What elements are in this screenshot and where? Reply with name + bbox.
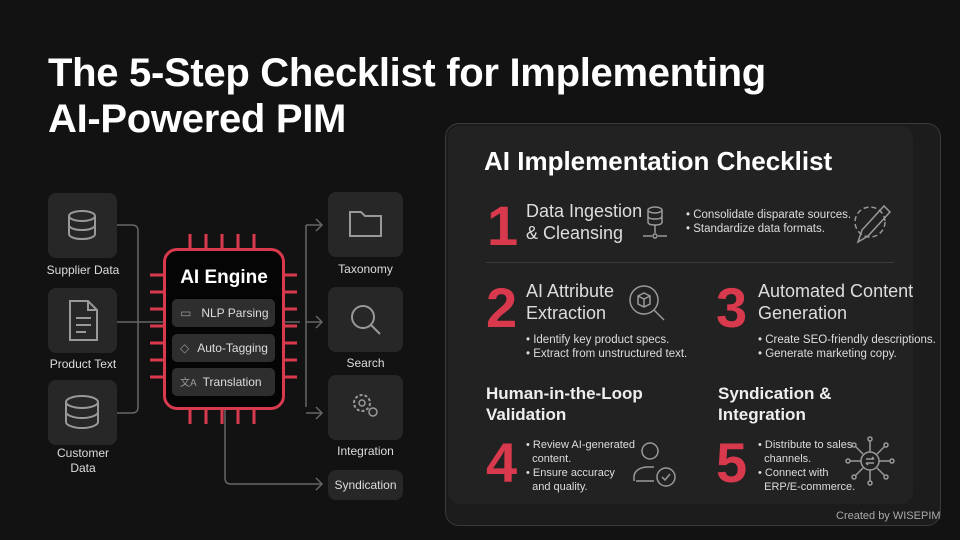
chip pins bbox=[150, 234, 297, 424]
output: taxonomy bbox=[328, 192, 403, 257]
step 3: 3 bbox=[716, 276, 747, 339]
text: Data bbox=[70, 461, 96, 475]
pill: translation bbox=[172, 368, 275, 396]
step 4: and quality. bbox=[532, 481, 588, 493]
input: customer data bbox=[48, 380, 117, 445]
panel: checklist bbox=[445, 123, 941, 526]
step 4: content. bbox=[532, 453, 571, 465]
step 2: AI Attribute bbox=[526, 281, 614, 301]
step 4: • Review AI-generated bbox=[526, 439, 635, 451]
step 3: Automated Content bbox=[758, 281, 913, 301]
text: Supplier Data bbox=[47, 263, 119, 277]
diagram: connectors bbox=[117, 218, 323, 490]
input: supplier data bbox=[48, 193, 117, 258]
step 1: 1 bbox=[487, 194, 518, 257]
pill: auto-tagging bbox=[172, 334, 275, 362]
text: Integration bbox=[337, 444, 394, 458]
step 5: ERP/E-commerce. bbox=[764, 481, 855, 493]
step 1: • Consolidate disparate sources. bbox=[686, 209, 851, 221]
step 3: • Create SEO-friendly descriptions. bbox=[758, 334, 936, 346]
step 5: 5 bbox=[716, 431, 747, 494]
step 3 bbox=[716, 276, 936, 360]
title: The 5-Step Checklist for Implementing bbox=[48, 51, 766, 95]
step 5: • Connect with bbox=[758, 467, 828, 479]
text: Taxonomy bbox=[338, 262, 393, 276]
text: Search bbox=[346, 356, 385, 370]
step 4 bbox=[486, 384, 676, 494]
step 5: channels. bbox=[764, 453, 811, 465]
text: Product Text bbox=[50, 357, 116, 371]
step 5 bbox=[716, 384, 895, 494]
step 2: • Extract from unstructured text. bbox=[526, 348, 687, 360]
step 2: Extraction bbox=[526, 303, 606, 323]
step 1 bbox=[487, 194, 891, 257]
checklist heading: AI Implementation Checklist bbox=[484, 146, 832, 176]
title: AI-Powered PIM bbox=[48, 97, 346, 141]
step 3: Generation bbox=[758, 303, 847, 323]
step 5: • Distribute to sales bbox=[758, 439, 852, 451]
title bbox=[48, 51, 766, 141]
step 2 bbox=[486, 276, 687, 360]
step 1: Data Ingestion bbox=[526, 201, 642, 221]
chip: AI Engine: AI Engine bbox=[180, 267, 268, 288]
pill: auto-tagging: ◇ Auto-Tagging bbox=[180, 341, 268, 355]
step 2: 2 bbox=[486, 276, 517, 339]
step 5: Integration bbox=[718, 405, 806, 424]
step 1: • Standardize data formats. bbox=[686, 223, 825, 235]
credit: Created by WISEPIM bbox=[836, 510, 941, 522]
input: product text bbox=[48, 288, 117, 353]
step 4: 4 bbox=[486, 431, 517, 494]
step 4: Human-in-the-Loop bbox=[486, 384, 643, 403]
text: Customer bbox=[57, 446, 109, 460]
chip: AI Engine bbox=[163, 248, 285, 410]
output: syndication bbox=[328, 470, 403, 500]
pill: translation: 文A Translation bbox=[180, 375, 262, 389]
pill: NLP parsing bbox=[172, 299, 275, 327]
pill: NLP parsing: ▭ NLP Parsing bbox=[180, 306, 268, 320]
step 3: • Generate marketing copy. bbox=[758, 348, 897, 360]
output: syndication: Syndication bbox=[334, 478, 397, 492]
step 2: • Identify key product specs. bbox=[526, 334, 669, 346]
step 4: • Ensure accuracy bbox=[526, 467, 615, 479]
output: integration bbox=[328, 375, 403, 440]
output: search bbox=[328, 287, 403, 352]
step 1: & Cleansing bbox=[526, 223, 623, 243]
step 5: Syndication & bbox=[718, 384, 831, 403]
step 4: Validation bbox=[486, 405, 566, 424]
